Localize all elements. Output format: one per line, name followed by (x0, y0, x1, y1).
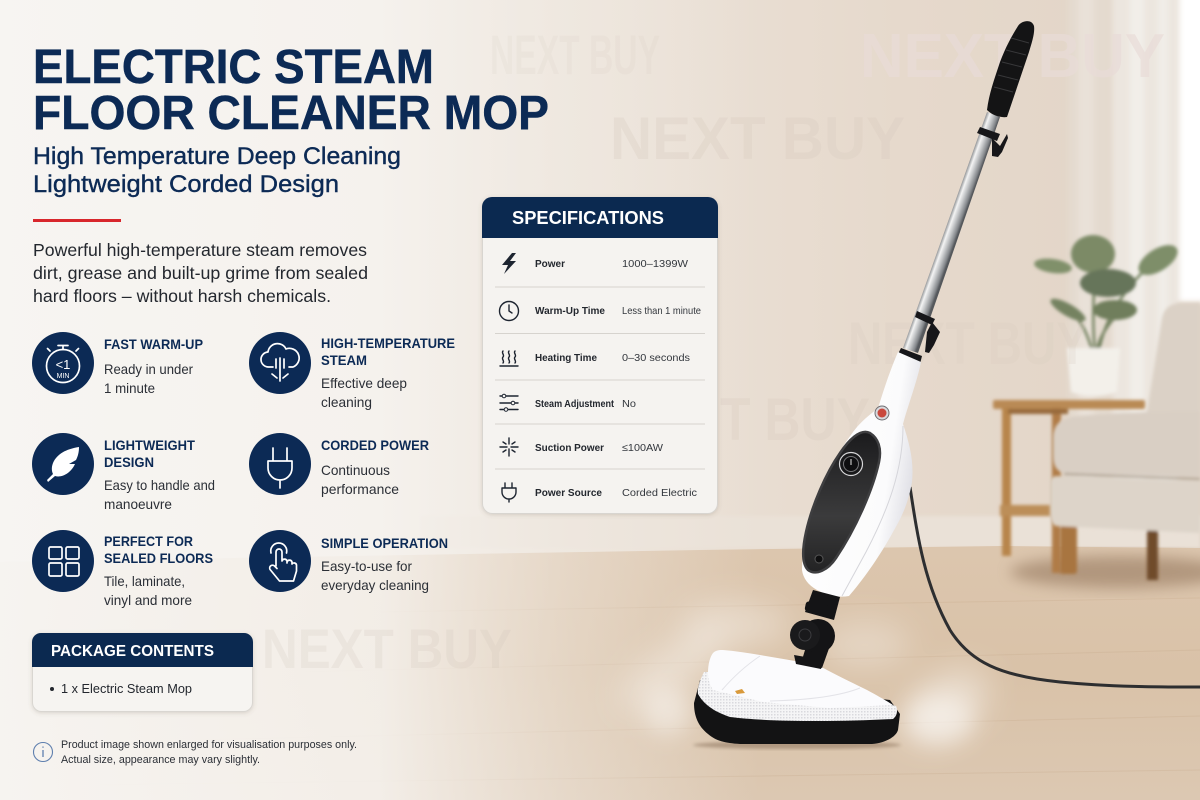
spec: power: 1000–1399W (622, 258, 688, 270)
handle grip (987, 21, 1034, 117)
spec: heating time: Heating Time (535, 352, 597, 364)
watermarks (262, 22, 1165, 680)
white main body (802, 352, 921, 597)
side table (993, 400, 1145, 573)
intro paragraph: hard floors – without harsh chemicals. (33, 286, 331, 306)
watermarks: NEXT BUY (610, 105, 905, 172)
spec: power: Power (535, 258, 565, 270)
spec: heating time (500, 351, 690, 366)
feature: corded power: performance (321, 481, 399, 497)
spec: warm-up time (500, 302, 701, 320)
watermarks: T BUY (720, 386, 870, 453)
intro paragraph: dirt, grease and built-up grime from sealed (33, 263, 368, 283)
panel: specifications: SPECIFICATIONS (512, 207, 664, 228)
subtitle: Lightweight Corded Design (33, 171, 339, 198)
subtitle: High Temperature Deep Cleaning (33, 143, 401, 170)
feature: lightweight design: DESIGN (104, 454, 154, 470)
panel: package contents (32, 633, 253, 712)
feature: sealed floors: vinyl and more (104, 592, 192, 608)
spec: heating time: 0–30 seconds (622, 352, 690, 364)
disclaimer note (34, 739, 357, 766)
steam wisps around mop head (644, 688, 974, 744)
floor head white cover (708, 650, 893, 708)
watermarks: NEXT BUY (262, 617, 512, 680)
spec: steam adjustment: Steam Adjustment (535, 398, 614, 410)
spec: suction power: ≤100AW (622, 442, 663, 454)
sofa (1050, 303, 1200, 580)
feature: simple operation: Easy-to-use for (321, 558, 412, 574)
spec: suction power: Suction Power (535, 442, 604, 454)
spec: steam adjustment: No (622, 398, 636, 410)
black water tank panel (803, 432, 880, 572)
feature: simple operation (249, 530, 448, 593)
feature: fast warm-up (32, 332, 203, 396)
feature: corded power: Continuous (321, 462, 390, 478)
subtitle (33, 143, 401, 198)
disclaimer note: Actual size, appearance may vary slightly. (61, 754, 260, 766)
feature: high-temperature steam: HIGH-TEMPERATURE (321, 335, 455, 351)
spec: power source: Power Source (535, 487, 602, 499)
feature: lightweight design (32, 433, 215, 512)
curtains and window (1068, 0, 1200, 530)
disclaimer note: Product image shown enlarged for visualisation purposes only. (61, 739, 357, 751)
panel: package contents: 1 x Electric Steam Mop (61, 681, 192, 696)
title (33, 40, 549, 140)
spec: power source (502, 483, 697, 502)
lower clamps (898, 311, 940, 364)
feature: fast warm-up: FAST WARM-UP (104, 336, 203, 352)
feature: corded power: CORDED POWER (321, 437, 429, 453)
feature: high-temperature steam (249, 332, 455, 410)
feature: lightweight design: manoeuvre (104, 496, 172, 512)
watermarks: NEXT BUY (860, 22, 1165, 91)
feature: lightweight design: LIGHTWEIGHT (104, 437, 195, 453)
red accent rule (33, 219, 121, 222)
dial (815, 452, 862, 563)
feature: fast warm-up: <1 (56, 357, 70, 372)
wooden floor (0, 546, 1200, 800)
intro paragraph (33, 240, 368, 306)
spec: power source: Corded Electric (622, 487, 697, 499)
left fade overlay (0, 0, 760, 800)
feature: lightweight design: Easy to handle and (104, 477, 215, 493)
feature: sealed floors: SEALED FLOORS (104, 550, 213, 566)
potted plant (1033, 235, 1182, 396)
title: ELECTRIC STEAM (33, 40, 434, 94)
watermarks: NEXT BUY (848, 310, 1088, 377)
floor head black base (694, 680, 900, 744)
watermarks: NEXT BUY (490, 23, 660, 86)
floor head shadow (693, 741, 901, 749)
feature: high-temperature steam: STEAM (321, 352, 367, 368)
feature: simple operation: SIMPLE OPERATION (321, 535, 448, 551)
feature: simple operation: everyday cleaning (321, 577, 429, 593)
floor head mesh pad (698, 672, 897, 721)
steam cloud on floor (609, 601, 1002, 757)
spec: warm-up time: Less than 1 minute (622, 305, 701, 317)
feature: sealed floors (32, 530, 213, 608)
baseboard (420, 516, 1200, 548)
feature: high-temperature steam: cleaning (321, 394, 372, 410)
panel: package contents: PACKAGE CONTENTS (51, 643, 214, 660)
intro paragraph: Powerful high-temperature steam removes (33, 240, 367, 260)
feature: fast warm-up: Ready in under (104, 361, 193, 377)
spec: warm-up time: Warm-Up Time (535, 305, 605, 317)
telescopic tube (903, 112, 1000, 353)
red steam button (875, 406, 889, 420)
upper clamp (977, 127, 1008, 157)
feature: high-temperature steam: Effective deep (321, 375, 407, 391)
feature: fast warm-up: 1 minute (104, 380, 155, 396)
steam mop product (693, 21, 1034, 749)
feature: sealed floors: PERFECT FOR (104, 533, 193, 549)
feature: fast warm-up: MIN (57, 373, 69, 380)
spec: power (502, 253, 688, 274)
feature: sealed floors: Tile, laminate, (104, 573, 185, 589)
power cord (910, 487, 1200, 687)
lower neck connector (790, 590, 840, 669)
spec: steam adjustment (500, 394, 636, 411)
panel: specifications (482, 197, 718, 514)
feature: corded power (249, 433, 429, 497)
title: FLOOR CLEANER MOP (33, 86, 549, 140)
spec: suction power (500, 438, 663, 456)
